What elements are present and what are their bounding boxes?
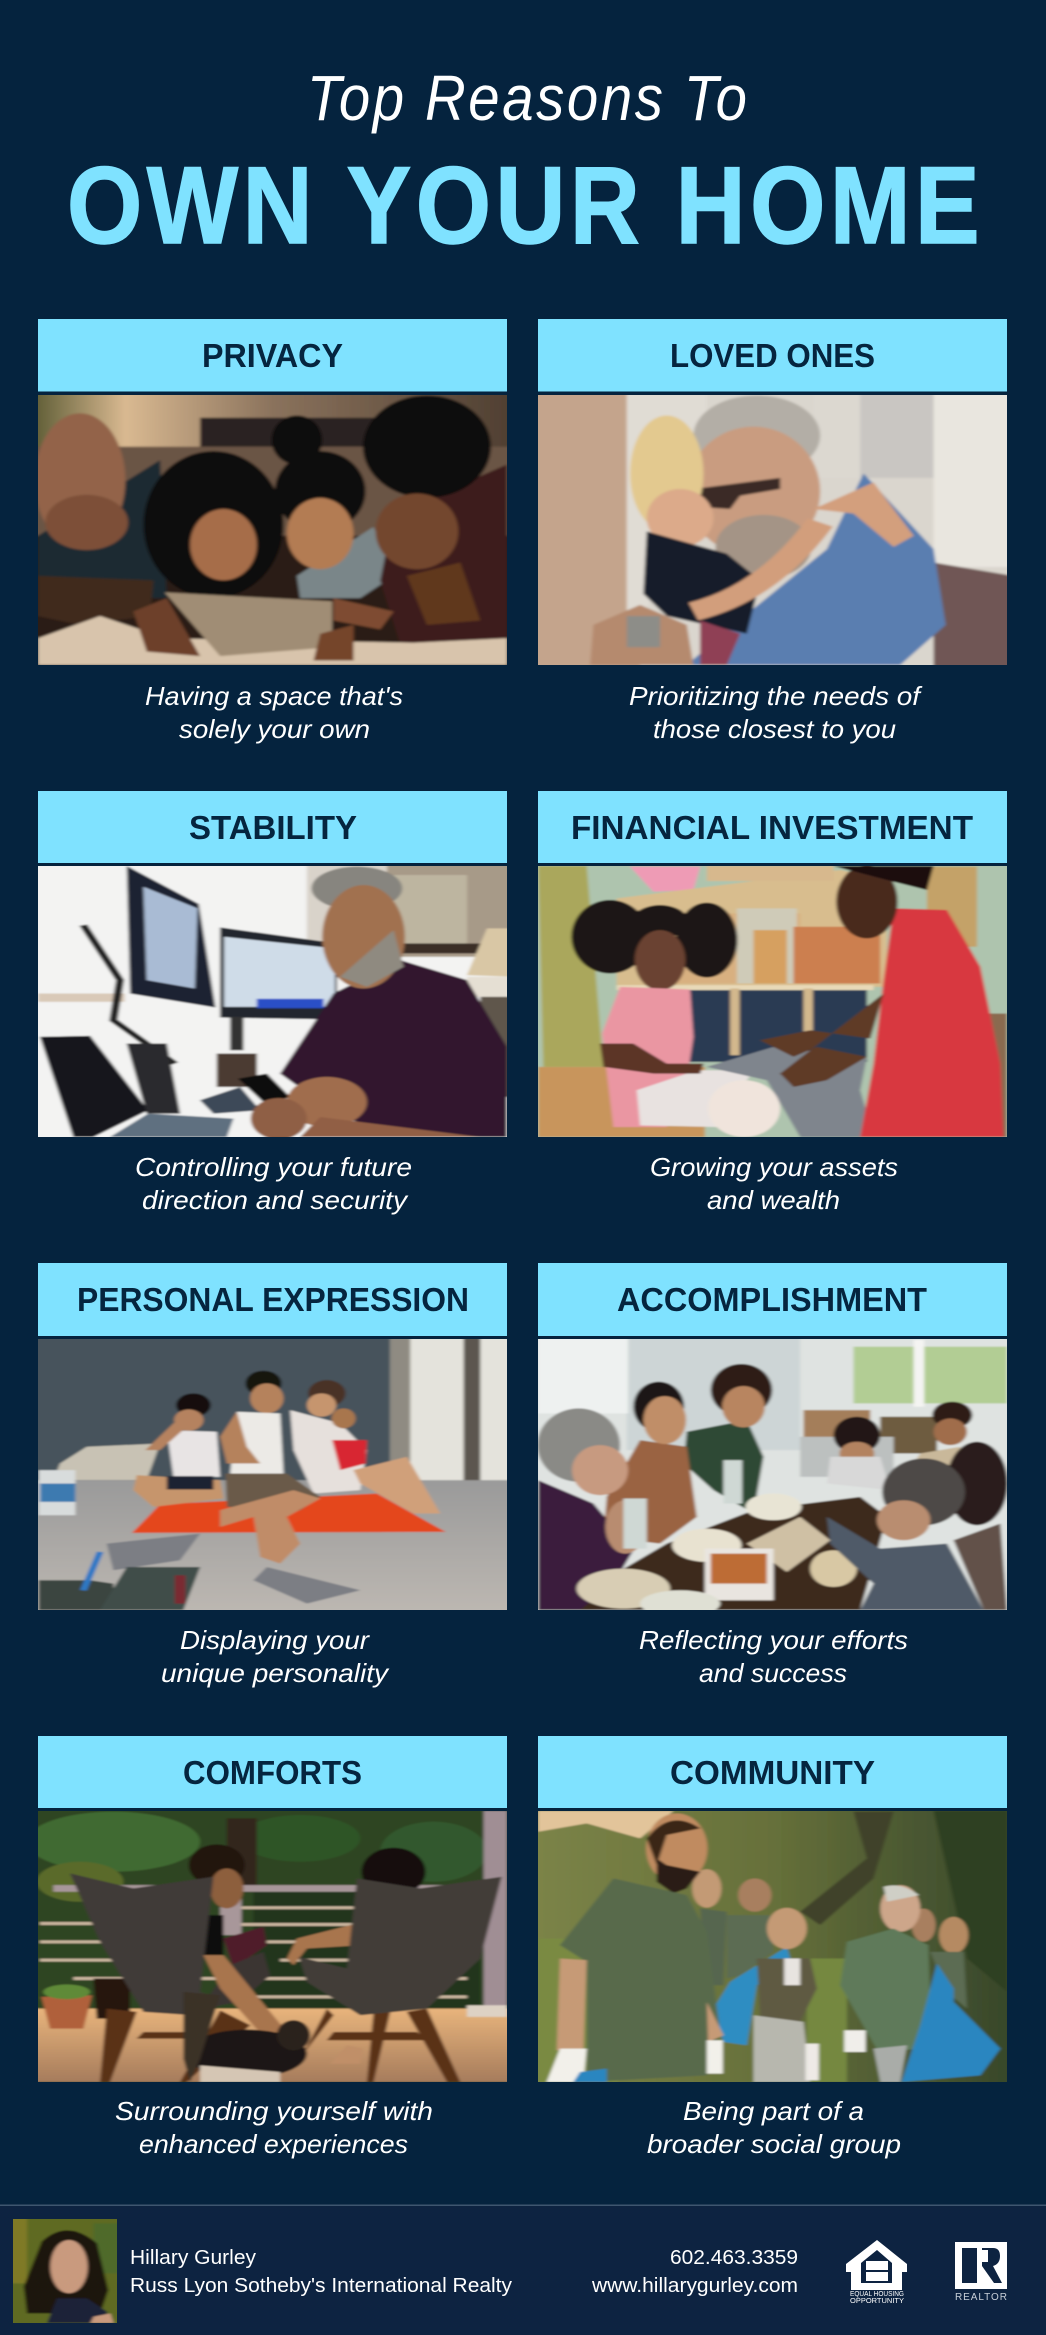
heading: comforts xyxy=(38,1736,507,1808)
agent name and brokerage xyxy=(130,2247,512,2297)
caption: privacy xyxy=(145,681,403,744)
caption: privacy: solely your own xyxy=(179,714,370,744)
caption: personal expression: Displaying your xyxy=(180,1625,370,1655)
panel: loved ones xyxy=(527,319,1020,744)
caption: accomplishment: Reflecting your efforts xyxy=(639,1625,908,1655)
icon: equal housing opportunity: OPPORTUNITY xyxy=(850,2298,904,2305)
heading: personal expression: PERSONAL EXPRESSION xyxy=(77,1281,469,1318)
icon: equal housing opportunity: EQUAL HOUSING xyxy=(850,2291,904,2298)
heading: personal expression xyxy=(38,1263,507,1336)
photo: family with tablet xyxy=(38,395,507,665)
heading: loved ones xyxy=(538,319,1007,392)
caption: comforts: enhanced experiences xyxy=(139,2129,408,2159)
caption: comforts xyxy=(115,2096,433,2159)
photo: family dinner xyxy=(538,1339,1007,1610)
photo: family eating on floor xyxy=(38,1339,507,1610)
photo: volunteers picking up litter xyxy=(538,1811,1007,2082)
caption: stability: direction and security xyxy=(142,1185,409,1215)
caption: accomplishment xyxy=(639,1625,908,1688)
caption: privacy: Having a space that's xyxy=(145,681,403,711)
caption: financial investment xyxy=(650,1152,898,1215)
caption: community xyxy=(647,2096,901,2159)
heading: privacy: PRIVACY xyxy=(202,337,343,374)
caption: accomplishment: and success xyxy=(699,1658,847,1688)
panel: accomplishment xyxy=(527,1263,1020,1688)
icon: realtor xyxy=(955,2242,1007,2303)
caption: community: Being part of a xyxy=(683,2096,864,2126)
contact details: www.hillarygurley.com xyxy=(591,2275,798,2297)
panel: personal expression xyxy=(27,1263,520,1688)
heading: community: COMMUNITY xyxy=(670,1754,875,1791)
heading: loved ones: LOVED ONES xyxy=(670,337,875,374)
caption: comforts: Surrounding yourself with xyxy=(115,2096,433,2126)
panel: financial investment xyxy=(527,791,1020,1215)
heading: stability: STABILITY xyxy=(189,809,357,846)
panel: privacy xyxy=(27,319,520,744)
icon: equal housing opportunity xyxy=(846,2240,907,2305)
title line: OWN YOUR HOME: OWN YOUR HOME xyxy=(67,143,980,266)
heading: financial investment xyxy=(538,791,1007,863)
heading: community xyxy=(538,1736,1007,1808)
caption: loved ones: those closest to you xyxy=(653,714,896,744)
photo: grandfather hugging child xyxy=(538,395,1007,665)
contact details: 602.463.3359 xyxy=(670,2247,798,2269)
agent name and brokerage: Russ Lyon Sotheby's International Realty xyxy=(130,2275,512,2297)
heading: financial investment: FINANCIAL INVESTMENT xyxy=(571,809,973,846)
title xyxy=(67,62,980,266)
heading: accomplishment: ACCOMPLISHMENT xyxy=(617,1281,927,1318)
caption: stability: Controlling your future xyxy=(135,1152,412,1182)
caption: personal expression xyxy=(161,1625,390,1688)
agent portrait xyxy=(13,2219,117,2323)
agent name and brokerage: Hillary Gurley xyxy=(130,2247,256,2269)
heading: stability xyxy=(38,791,507,863)
caption: financial investment: Growing your assets xyxy=(650,1152,898,1182)
panel: stability xyxy=(27,791,520,1215)
photo: man with phone at desk xyxy=(38,866,507,1137)
caption: personal expression: unique personality xyxy=(161,1658,390,1688)
caption: loved ones: Prioritizing the needs of xyxy=(629,681,923,711)
caption: stability xyxy=(135,1152,412,1215)
panel: comforts xyxy=(27,1736,520,2159)
caption: community: broader social group xyxy=(647,2129,901,2159)
title line: Top Reasons To: Top Reasons To xyxy=(307,62,747,134)
footer xyxy=(0,2204,1046,2335)
photo: couple on porch chairs xyxy=(38,1811,507,2082)
heading: accomplishment xyxy=(538,1263,1007,1336)
caption: financial investment: and wealth xyxy=(707,1185,840,1215)
panel: community xyxy=(527,1736,1020,2159)
contact details xyxy=(591,2247,798,2297)
caption: loved ones xyxy=(629,681,923,744)
icon: realtor: REALTOR xyxy=(955,2292,1007,2303)
heading: privacy xyxy=(38,319,507,392)
photo: mother and daughter with piggy bank xyxy=(538,866,1007,1137)
heading: comforts: COMFORTS xyxy=(183,1754,362,1791)
